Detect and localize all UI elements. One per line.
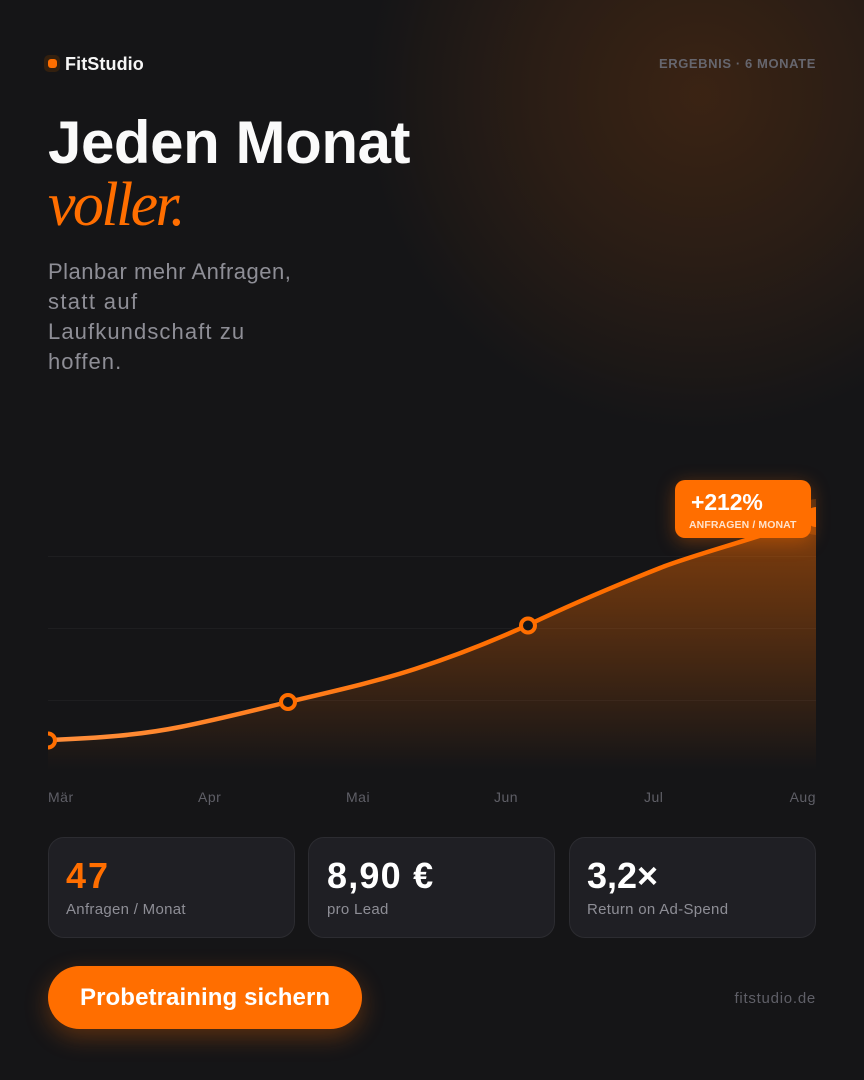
title line one: Jeden Monat (48, 109, 410, 176)
month: Apr (198, 789, 221, 805)
growth value: +212% (691, 489, 763, 515)
stat label: Anfragen / Monat (66, 901, 186, 918)
brand name: FitStudio (65, 54, 144, 74)
stat card: cost per lead (308, 837, 555, 938)
stat value: 3,2× (587, 855, 658, 896)
data point: Aug (798, 499, 834, 535)
stat card: ROAS (569, 837, 816, 938)
stat label: Return on Ad-Spend (587, 901, 728, 918)
subtitle line: statt auf (48, 289, 138, 314)
stat card: inquiries (48, 837, 295, 938)
subtitle line: Laufkundschaft zu (48, 319, 245, 344)
month: Aug (790, 789, 816, 805)
month: Mai (346, 789, 370, 805)
brand logo (44, 54, 144, 74)
icon: logo square (44, 55, 60, 72)
data point: Mär (41, 734, 55, 748)
growth callout (675, 480, 811, 538)
CTA label: Probetraining sichern (80, 984, 330, 1011)
data point: Apr (281, 695, 295, 709)
month: Jun (494, 789, 518, 805)
subtitle line: Planbar mehr Anfragen, (48, 259, 291, 284)
period label: ERGEBNIS · 6 MONATE (659, 56, 816, 71)
month: Jul (644, 789, 663, 805)
subtitle line: hoffen. (48, 349, 122, 374)
title (48, 109, 410, 239)
CTA button (48, 966, 362, 1029)
trend line (48, 516, 816, 740)
data point: Jun (521, 618, 535, 632)
stat value: 8,90 € (327, 855, 434, 896)
stat value: 47 (66, 855, 110, 896)
title accent: voller. (48, 171, 183, 239)
area under curve (48, 516, 816, 770)
growth label: ANFRAGEN / MONAT (689, 519, 797, 531)
month: Mär (48, 789, 74, 805)
website: fitstudio.de (734, 990, 816, 1007)
stat label: pro Lead (327, 901, 389, 918)
subtitle (48, 259, 291, 374)
line chart (48, 499, 816, 750)
x axis labels (48, 789, 816, 805)
